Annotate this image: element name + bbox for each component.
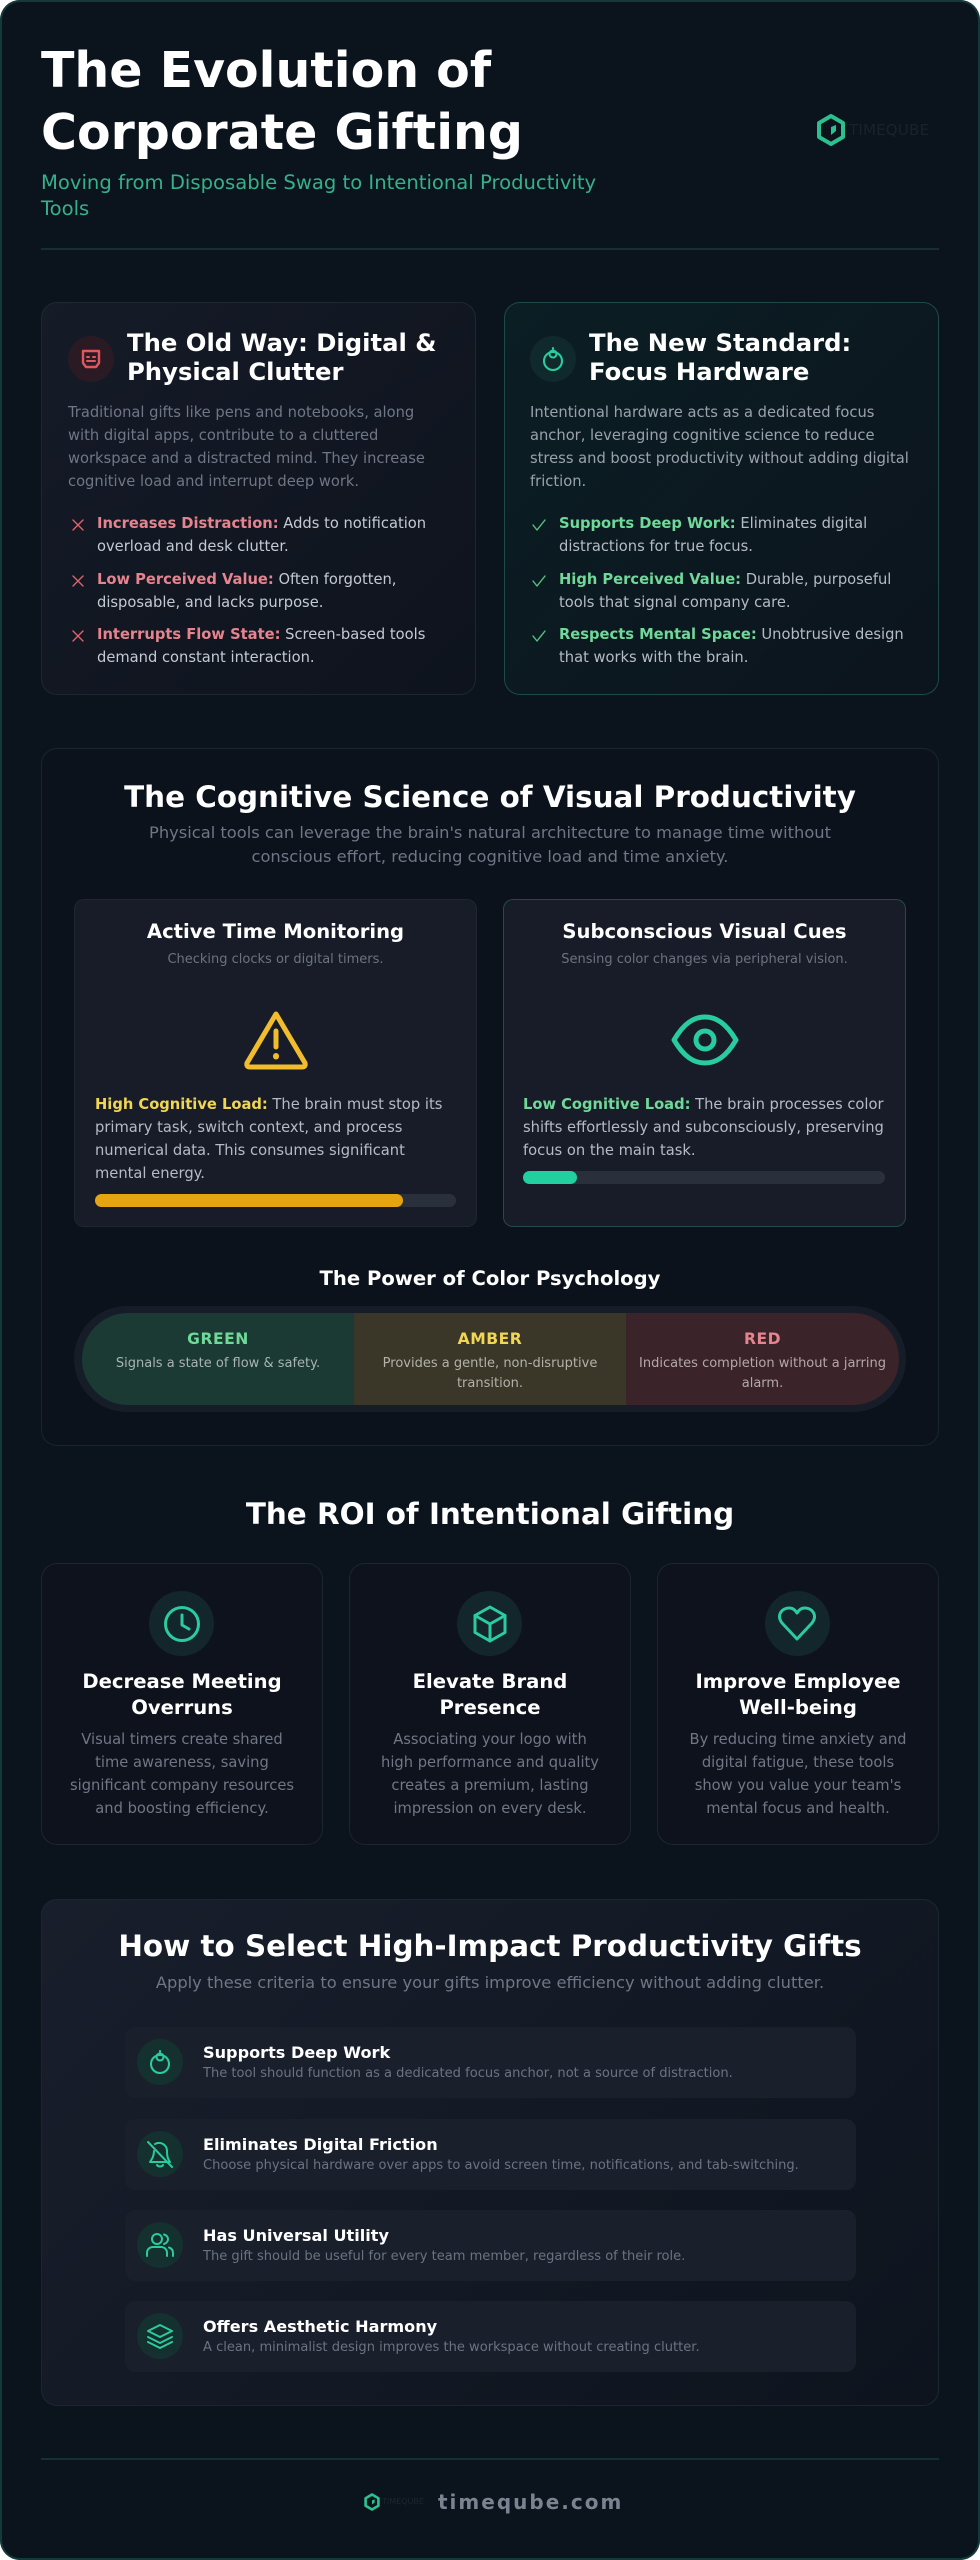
list item: high perceived value: tools that signal company care. <box>559 594 791 611</box>
caption: active monitoring: Checking clocks or digital timers. <box>167 952 384 967</box>
row: aesthetic harmony <box>125 2301 856 2372</box>
icon: warning <box>244 1012 308 1070</box>
icon: layers <box>137 2313 183 2359</box>
footer <box>364 2490 623 2514</box>
icon: check 3 <box>532 630 546 642</box>
list item: increases distraction: overload and desk clutter. <box>97 538 289 555</box>
icon: cube <box>457 1591 522 1656</box>
heading: new standard: The New Standard: <box>589 328 851 356</box>
logo: footer: TIMEQUBE <box>382 2497 424 2506</box>
text: well-being: digital fatigue, these tools <box>702 1754 894 1771</box>
subtitle: Tools <box>41 197 89 220</box>
icon: check 1 <box>532 519 546 531</box>
heading: old way: Physical Clutter <box>127 356 343 386</box>
list item: interrupts flow state <box>97 626 425 666</box>
heading: roi: The ROI of Intentional Gifting <box>246 1497 734 1531</box>
title: universal utility: Has Universal Utility <box>203 2226 389 2245</box>
title: aesthetic harmony: Offers Aesthetic Harmony <box>203 2317 437 2336</box>
logo: timeqube header: TIMEQUBE <box>849 121 929 139</box>
icon: clock <box>149 1591 214 1656</box>
text: meeting overruns <box>70 1731 294 1817</box>
heading: old way: The Old Way: Digital & <box>127 328 436 356</box>
bar: low load <box>523 1171 885 1184</box>
text: brand presence: high performance and quality <box>381 1754 599 1771</box>
label: red: RED <box>744 1330 781 1348</box>
text: low cognitive load: focus on the main task. <box>523 1142 696 1159</box>
text: universal utility: The gift should be useful for every team member, regardless of their role. <box>203 2249 685 2264</box>
list item: increases distraction: Increases Distraction: Adds to notification <box>97 515 426 532</box>
text: green: Signals a state of flow & safety. <box>116 1356 320 1371</box>
heading: old way <box>127 328 436 386</box>
card: active time monitoring <box>74 899 477 1227</box>
text: well-being: show you value your team's <box>695 1777 901 1794</box>
bar fill: low load <box>523 1171 577 1184</box>
text: high cognitive load: mental energy. <box>95 1165 205 1182</box>
list item: supports deep work: distractions for true focus. <box>559 538 753 555</box>
text: high cognitive load <box>95 1096 442 1182</box>
list item: interrupts flow state: Interrupts Flow State: Screen-based tools <box>97 626 425 643</box>
text: supports deep work: The tool should function as a dedicated focus anchor, not a source of distraction. <box>203 2066 733 2081</box>
card: meeting overruns <box>41 1563 323 1845</box>
label: amber: AMBER <box>458 1330 522 1348</box>
card: subconscious visual cues <box>503 899 906 1227</box>
text: brand presence <box>381 1731 599 1817</box>
row: universal utility <box>125 2210 856 2281</box>
text: amber <box>383 1356 597 1391</box>
text: meeting overruns: and boosting efficiency. <box>95 1800 269 1817</box>
list item: high perceived value <box>559 571 891 611</box>
list item: low perceived value <box>97 571 396 611</box>
description: old way: workspace and a distracted mind. They increase <box>68 450 425 467</box>
card: brand presence <box>349 1563 631 1845</box>
heading: meeting overruns <box>82 1670 282 1719</box>
heading: meeting overruns: Decrease Meeting <box>82 1670 282 1693</box>
heading: well-being <box>695 1670 901 1719</box>
segment: green <box>82 1313 354 1405</box>
bar fill: high load <box>95 1194 403 1207</box>
panel: the old way <box>41 302 476 695</box>
text: low cognitive load: Low Cognitive Load: The brain processes color <box>523 1096 884 1113</box>
text: low cognitive load <box>523 1096 884 1159</box>
heading: selection: How to Select High-Impact Productivity Gifts <box>118 1929 862 1963</box>
text: red: Indicates completion without a jarring <box>639 1356 886 1371</box>
heading: brand presence: Elevate Brand <box>413 1670 567 1693</box>
icon: focus <box>530 336 576 382</box>
list item: low perceived value: Low Perceived Value: Often forgotten, <box>97 571 396 588</box>
list item: respects mental space: that works with the brain. <box>559 649 748 666</box>
text: meeting overruns: significant company resources <box>70 1777 294 1794</box>
list item: respects mental space: Respects Mental Space: Unobtrusive design <box>559 626 904 643</box>
heading: meeting overruns: Overruns <box>131 1696 233 1719</box>
description: new standard: friction. <box>530 473 586 490</box>
bar: high load <box>95 1194 456 1207</box>
intro: selection: Apply these criteria to ensure your gifts improve efficiency without adding clutter. <box>156 1973 824 1992</box>
text: aesthetic harmony: A clean, minimalist design improves the workspace without creating clutter. <box>203 2340 700 2355</box>
text: high cognitive load: numerical data. This consumes significant <box>95 1142 405 1159</box>
title: supports deep work: Supports Deep Work <box>203 2043 390 2062</box>
title: eliminates friction: Eliminates Digital Friction <box>203 2135 438 2154</box>
subtitle: Moving from Disposable Swag to Intentional Productivity <box>41 171 596 194</box>
logo: timeqube header <box>817 114 929 146</box>
row: supports deep work <box>125 2027 856 2098</box>
icon: clutter <box>68 336 114 382</box>
text: red <box>639 1356 886 1391</box>
color pill <box>74 1306 906 1412</box>
icon: check 2 <box>532 575 546 587</box>
icon: bell off <box>137 2131 183 2177</box>
row: eliminates digital friction <box>125 2119 856 2190</box>
description: new standard <box>530 404 909 490</box>
list item: high perceived value: High Perceived Value: Durable, purposeful <box>559 571 891 588</box>
subtitle <box>40 171 596 220</box>
heading: well-being: Improve Employee <box>695 1670 901 1693</box>
description: old way <box>68 404 425 490</box>
title <box>41 42 523 161</box>
text: well-being: By reducing time anxiety and <box>690 1731 906 1748</box>
intro text: Physical tools can leverage the brain's natural architecture to manage time without <box>149 823 831 842</box>
text: brand presence: impression on every desk. <box>393 1800 587 1817</box>
text: brand presence: Associating your logo with <box>393 1731 587 1748</box>
intro text: conscious effort, reducing cognitive load and time anxiety. <box>252 847 728 866</box>
description: new standard: Intentional hardware acts as a dedicated focus <box>530 404 874 421</box>
logo: footer <box>364 2493 424 2511</box>
panel: cognitive science <box>41 748 939 1446</box>
heading: new standard: Focus Hardware <box>589 356 809 386</box>
text: red: alarm. <box>742 1376 783 1391</box>
list item: low perceived value: disposable, and lacks purpose. <box>97 594 323 611</box>
text: high cognitive load: primary task, switch context, and process <box>95 1119 402 1136</box>
heading: color psychology: The Power of Color Psychology <box>320 1267 660 1290</box>
icon: users <box>137 2222 183 2268</box>
list item: respects mental space <box>559 626 904 666</box>
heading: active monitoring: Active Time Monitoring <box>147 920 404 943</box>
heading: brand presence <box>413 1670 567 1719</box>
label: green: GREEN <box>187 1330 249 1348</box>
text: high cognitive load: High Cognitive Load: The brain must stop its <box>95 1096 442 1113</box>
heading: visual cues: Subconscious Visual Cues <box>562 920 847 943</box>
description: old way: with digital apps, contribute to a cluttered <box>68 427 378 444</box>
text: eliminates friction: Choose physical hardware over apps to avoid screen time, notifications, and tab-switching. <box>203 2158 799 2173</box>
description: old way: Traditional gifts like pens and notebooks, along <box>68 404 414 421</box>
text: low cognitive load: shifts effortlessly and subconsciously, preserving <box>523 1119 884 1136</box>
list item: supports deep work: Supports Deep Work: Eliminates digital <box>559 515 867 532</box>
heading: new standard <box>589 328 851 386</box>
icon: x mark 2 <box>72 575 84 587</box>
icon: x mark 3 <box>72 630 84 642</box>
description: new standard: anchor, leveraging cognitive science to reduce <box>530 427 874 444</box>
text: meeting overruns: time awareness, saving <box>95 1754 269 1771</box>
heading: brand presence: Presence <box>439 1696 541 1719</box>
panel: the new standard <box>504 302 939 695</box>
intro text <box>149 823 831 866</box>
icon: heart <box>765 1591 830 1656</box>
title: The Evolution of <box>41 42 491 99</box>
caption: visual cues: Sensing color changes via peripheral vision. <box>561 952 848 967</box>
text: amber: Provides a gentle, non-disruptive <box>383 1356 597 1371</box>
text: well-being <box>690 1731 906 1817</box>
icon: focus <box>137 2039 183 2085</box>
text: amber: transition. <box>457 1376 523 1391</box>
text: well-being: mental focus and health. <box>706 1800 890 1817</box>
icon: eye <box>672 1014 738 1066</box>
text: brand presence: creates a premium, lasting <box>391 1777 589 1794</box>
heading: well-being: Well-being <box>739 1696 857 1719</box>
footer url: timeqube.com <box>438 2490 623 2514</box>
segment: amber <box>354 1313 626 1405</box>
list item: supports deep work <box>559 515 867 555</box>
text: meeting overruns: Visual timers create shared <box>81 1731 283 1748</box>
list item: interrupts flow state: demand constant interaction. <box>97 649 315 666</box>
segment: red <box>626 1313 899 1405</box>
panel: selection criteria <box>41 1899 939 2406</box>
icon: x mark 1 <box>72 519 84 531</box>
title: Corporate Gifting <box>41 104 523 161</box>
heading: cognitive science: The Cognitive Science of Visual Productivity <box>124 780 856 814</box>
description: old way: cognitive load and interrupt deep work. <box>68 473 359 490</box>
description: new standard: stress and boost productivity without adding digital <box>530 450 909 467</box>
list item: increases distraction <box>97 515 426 555</box>
card: employee well-being <box>657 1563 939 1845</box>
